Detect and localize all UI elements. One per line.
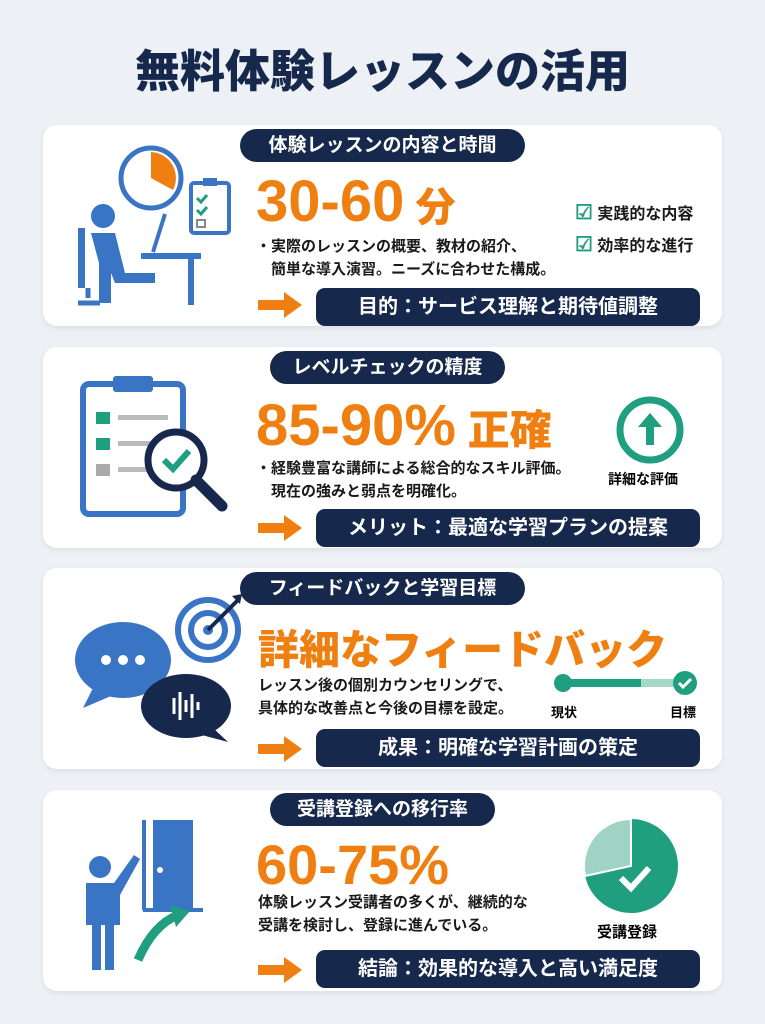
panel: trial lesson content <box>43 125 722 326</box>
description <box>258 894 528 934</box>
icon: up arrow circle <box>616 396 684 464</box>
progress labels: 目標 <box>670 705 696 720</box>
progress labels <box>551 705 696 720</box>
icon: person at door with arrow <box>86 820 203 970</box>
icon: pie chart <box>584 819 678 913</box>
conclusion bar <box>316 509 700 547</box>
arrow <box>258 292 302 318</box>
description: ・経験豊富な講師による総合的なスキル評価。 <box>256 460 571 477</box>
heading: 体験レッスンの内容と時間 <box>268 135 496 156</box>
icon: person at desk with clock <box>78 146 231 306</box>
checklist <box>575 202 693 256</box>
heading: フィードバックと学習目標 <box>269 578 496 599</box>
icon: speech bubbles and target <box>75 594 242 742</box>
big heading: 詳細なフィードバック <box>258 627 667 673</box>
progress labels: 現状 <box>551 705 577 720</box>
arrow <box>258 515 302 541</box>
big number: 30-60 分 <box>256 169 455 234</box>
conclusion bar: メリット：最適な学習プランの提案 <box>348 517 668 539</box>
arrow <box>258 957 302 983</box>
pie label: 受講登録 <box>597 924 657 941</box>
arrow <box>258 736 302 762</box>
description <box>258 677 513 717</box>
panel: feedback <box>43 568 722 769</box>
conclusion bar <box>316 950 700 988</box>
description: ・実際のレッスンの概要、教材の紹介、 <box>256 238 526 255</box>
progress indicator <box>554 671 697 695</box>
heading: レベルチェックの精度 <box>292 357 482 378</box>
title: 無料体験レッスンの活用 <box>135 46 630 97</box>
description: 受講を検討し、登録に進んでいる。 <box>258 917 497 934</box>
checklist: ☑ 実践的な内容 <box>575 202 693 224</box>
description: 簡単な導入演習。ニーズに合わせた構成。 <box>271 261 555 278</box>
icon label: 詳細な評価 <box>608 471 678 487</box>
description <box>256 460 571 500</box>
description <box>256 238 555 278</box>
description: レッスン後の個別カウンセリングで、 <box>258 677 512 694</box>
description: 体験レッスン受講者の多くが、継続的な <box>258 894 528 911</box>
description: 具体的な改善点と今後の目標を設定。 <box>258 700 513 717</box>
heading <box>240 129 525 162</box>
big number: 60-75% <box>256 833 449 896</box>
conclusion bar <box>316 729 700 767</box>
panel: enrollment <box>43 790 722 991</box>
big number: 85-90% 正確 <box>256 393 552 458</box>
heading <box>270 793 495 826</box>
conclusion bar: 目的：サービス理解と期待値調整 <box>358 296 658 318</box>
heading <box>240 572 525 605</box>
conclusion bar <box>316 288 700 326</box>
checklist: ☑ 効率的な進行 <box>575 234 693 256</box>
heading <box>270 351 505 384</box>
conclusion bar: 成果：明確な学習計画の策定 <box>378 737 638 759</box>
heading: 受講登録への移行率 <box>297 799 468 820</box>
conclusion bar: 結論：効果的な導入と高い満足度 <box>358 958 658 980</box>
panel: level check <box>43 347 722 548</box>
description: 現在の強みと弱点を明確化。 <box>271 483 466 500</box>
icon: clipboard with magnifier <box>80 376 228 517</box>
